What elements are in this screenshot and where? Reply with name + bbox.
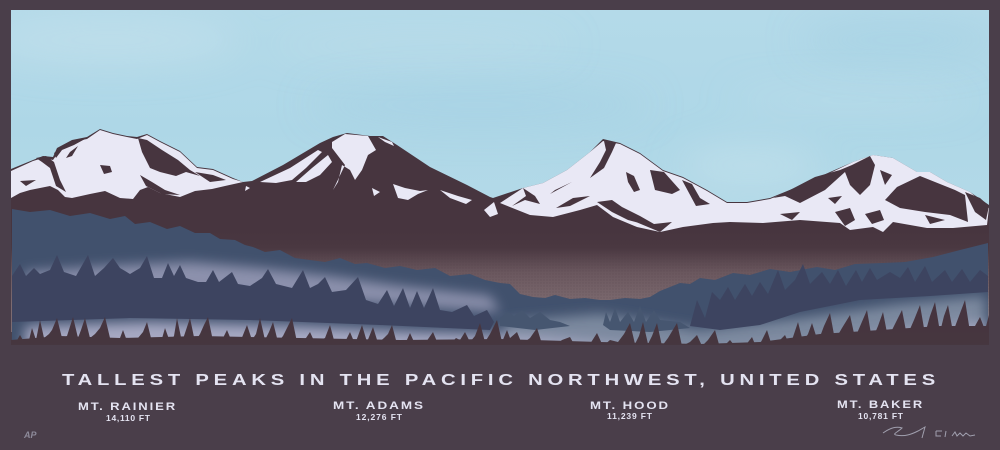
peak label: Mt. Hood: 11,239 FT (607, 411, 653, 421)
peak label: Mt. Rainier (78, 401, 177, 423)
mid treeline: right (690, 264, 988, 330)
peak label: Mt. Baker (837, 399, 924, 421)
front treeline (11, 300, 989, 365)
Mt. Baker rock (773, 156, 989, 226)
peak label: Mt. Hood (590, 400, 670, 421)
sky with clouds (0, 9, 1000, 249)
mountain range base (11, 129, 989, 240)
forest base and valley haze (11, 232, 989, 332)
blue hill treeline (12, 209, 988, 345)
peak label: Mt. Adams (333, 400, 425, 422)
peak label: Mt. Rainier: 14,110 FT (106, 413, 151, 423)
Mt. Adams snow (245, 134, 498, 217)
Mt. Hood snow (483, 141, 989, 232)
peak label: Mt. Baker: MT. BAKER (837, 399, 924, 411)
peak label: Mt. Rainier: MT. RAINIER (78, 401, 177, 413)
edition mark: AP (23, 430, 37, 440)
peak label: Mt. Hood: MT. HOOD (590, 400, 670, 412)
Mt. Rainier snow (11, 130, 243, 199)
title: TALLEST PEAKS IN THE PACIFIC NORTHWEST, UNITED STATES (62, 372, 940, 389)
peak label: Mt. Baker: 10,781 FT (858, 411, 904, 421)
artist signature (883, 427, 975, 438)
mist bands (25, 262, 985, 356)
mid treeline: left (12, 255, 494, 330)
center small treeline (500, 306, 690, 332)
peak label: Mt. Adams: MT. ADAMS (333, 400, 425, 412)
peak label: Mt. Adams: 12,276 FT (356, 412, 403, 422)
